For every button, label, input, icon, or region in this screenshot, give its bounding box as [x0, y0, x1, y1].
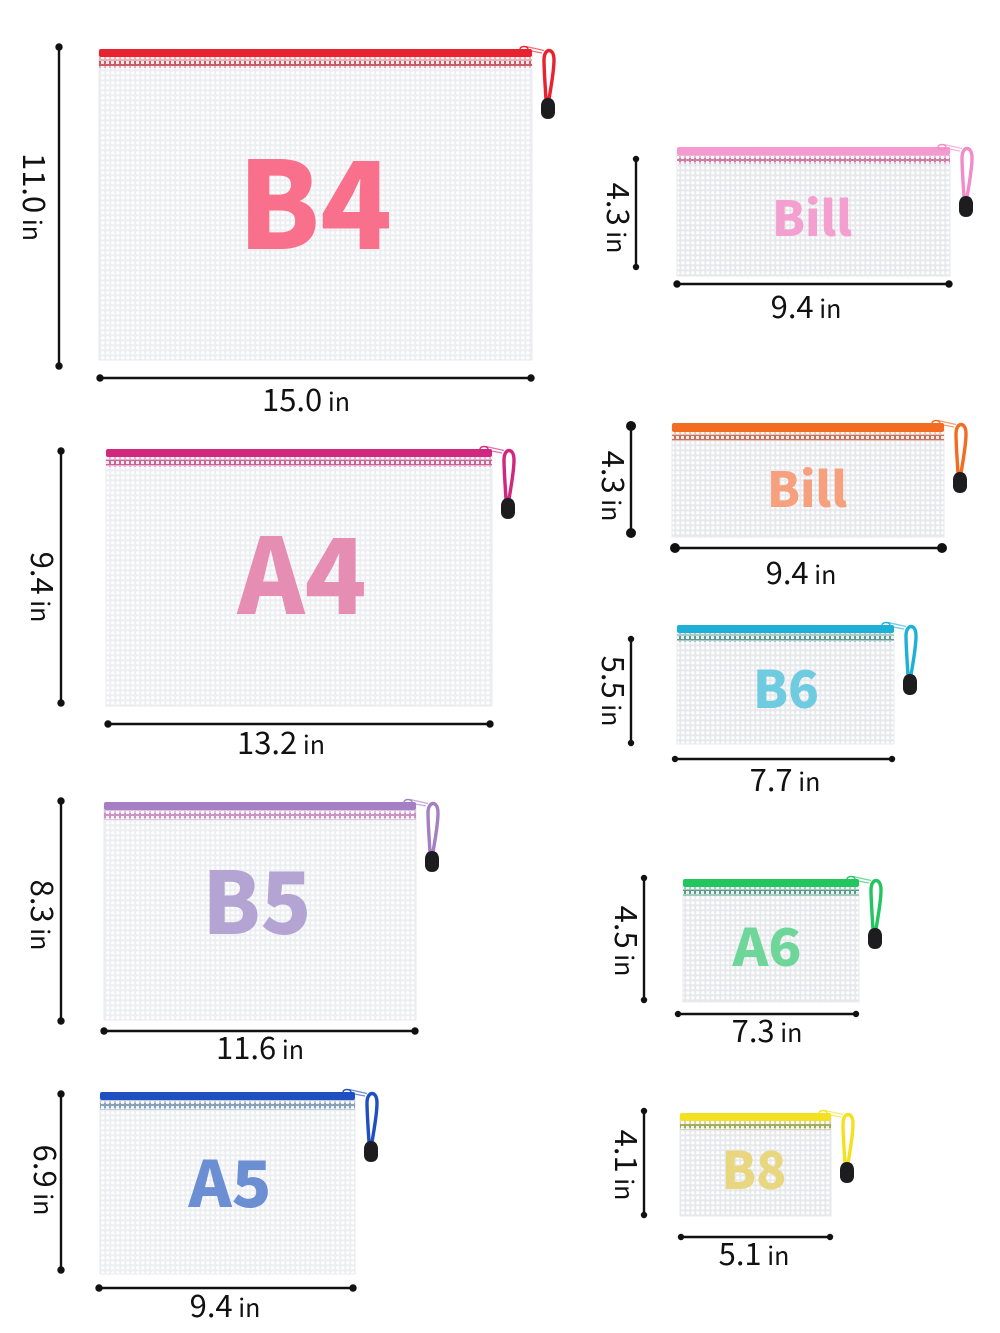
dimension: B6 width: 7.7 in [750, 755, 820, 800]
dimension: Bill pink height [598, 156, 643, 270]
dimension: A4 width: 13.2 in [237, 718, 325, 763]
dimension: B4 height: 11.0 in [14, 153, 59, 241]
dimension: Bill pink width [673, 280, 953, 327]
label: B4: B4 [238, 109, 392, 284]
dimension: A4 height: 9.4 in [22, 552, 67, 622]
dimension: Bill pink width: 9.4 in [771, 282, 841, 327]
dimension: B5 width: 11.6 in [216, 1023, 304, 1068]
dimension: A6 height: 4.5 in [606, 906, 651, 976]
dimension: Bill orange width [670, 543, 947, 593]
label: B5: B5 [202, 834, 312, 959]
dimension: A4 width [104, 718, 494, 763]
dimension: A5 height: 6.9 in [25, 1145, 70, 1215]
dimension: B5 height: 8.3 in [22, 880, 67, 950]
dimension: A5 height [25, 1090, 70, 1274]
dimension: B6 width [672, 755, 895, 800]
label: B8: B8 [722, 1129, 786, 1204]
dimension: Bill orange height: 4.3 in [593, 451, 638, 521]
label: A5: A5 [187, 1134, 272, 1226]
pouch: Bill orange [672, 420, 967, 537]
pouch: Bill pink [677, 144, 973, 276]
dimension: B8 width: 5.1 in [719, 1229, 789, 1274]
pouch: B8 [680, 1110, 854, 1216]
dimension: B5 width [100, 1023, 419, 1068]
dimension: A5 width [95, 1281, 357, 1326]
label: B6: B6 [753, 648, 819, 723]
dimension: Bill orange height [593, 421, 638, 538]
dimension: B8 width [678, 1229, 833, 1274]
pouch: A5 [100, 1090, 378, 1274]
dimension: B6 height [593, 636, 638, 746]
pouch: B4 [99, 46, 555, 360]
dimension: Bill orange width: 9.4 in [766, 548, 836, 593]
dimension: B8 height [606, 1108, 651, 1218]
dimension: A6 width [675, 1006, 859, 1051]
dimension: B6 height: 5.5 in [593, 656, 638, 726]
dimension: B8 height: 4.1 in [606, 1130, 651, 1200]
dimension: B4 width [96, 374, 535, 420]
pouch: B6 [677, 622, 917, 744]
dimension: B4 height [14, 43, 63, 370]
label: Bill: Bill [772, 180, 852, 250]
dimension: Bill pink height: 4.3 in [598, 183, 643, 253]
dimension: A6 width: 7.3 in [732, 1006, 802, 1051]
pouch: A4 [106, 446, 515, 706]
label: Bill: Bill [767, 451, 847, 521]
dimension: A4 height [22, 447, 67, 707]
dimension: B4 width: 15.0 in [262, 375, 350, 420]
pouch: A6 [683, 876, 882, 1002]
dimension: A6 height [606, 875, 651, 1003]
dimension: B5 height [22, 797, 67, 1025]
label: A6: A6 [731, 906, 802, 981]
pouch: B5 [104, 800, 439, 1020]
dimension: A5 width: 9.4 in [190, 1281, 260, 1326]
label: A4: A4 [237, 493, 366, 645]
